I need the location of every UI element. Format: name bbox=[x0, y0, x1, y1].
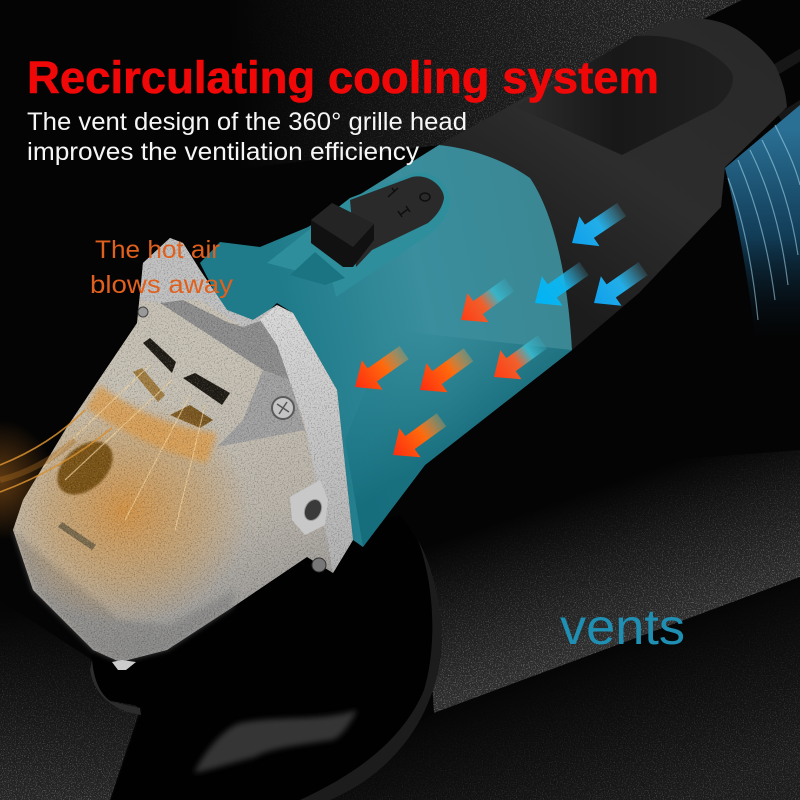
top lug shading bbox=[140, 238, 285, 345]
description text bbox=[27, 108, 467, 166]
heading: Recirculating cooling system bbox=[27, 52, 659, 103]
black handle bbox=[439, 18, 787, 350]
screws and threaded boss bbox=[112, 307, 328, 670]
vent slots bbox=[133, 338, 230, 428]
blue air flow at handle bbox=[725, 105, 800, 335]
hot air glow on head bbox=[14, 238, 353, 660]
teal motor body bbox=[200, 145, 572, 547]
hot air stream bbox=[0, 410, 112, 492]
description text: The vent design of the 360° grille head bbox=[27, 108, 467, 136]
hot air label bbox=[90, 236, 234, 299]
orange exhaust arrows bbox=[345, 270, 553, 470]
aluminium gear head bbox=[0, 230, 370, 670]
description text: improves the ventilation efficiency bbox=[27, 138, 420, 166]
blue intake arrows bbox=[525, 195, 653, 318]
vents label: vents bbox=[560, 599, 685, 655]
hot air label: blows away bbox=[90, 271, 234, 299]
slide switch bbox=[311, 176, 444, 267]
mounting plate bbox=[260, 305, 353, 573]
neck shading bbox=[217, 370, 305, 447]
black protective guard bbox=[90, 515, 441, 800]
hot air label: The hot air bbox=[95, 236, 220, 264]
power cable bbox=[772, 52, 800, 118]
